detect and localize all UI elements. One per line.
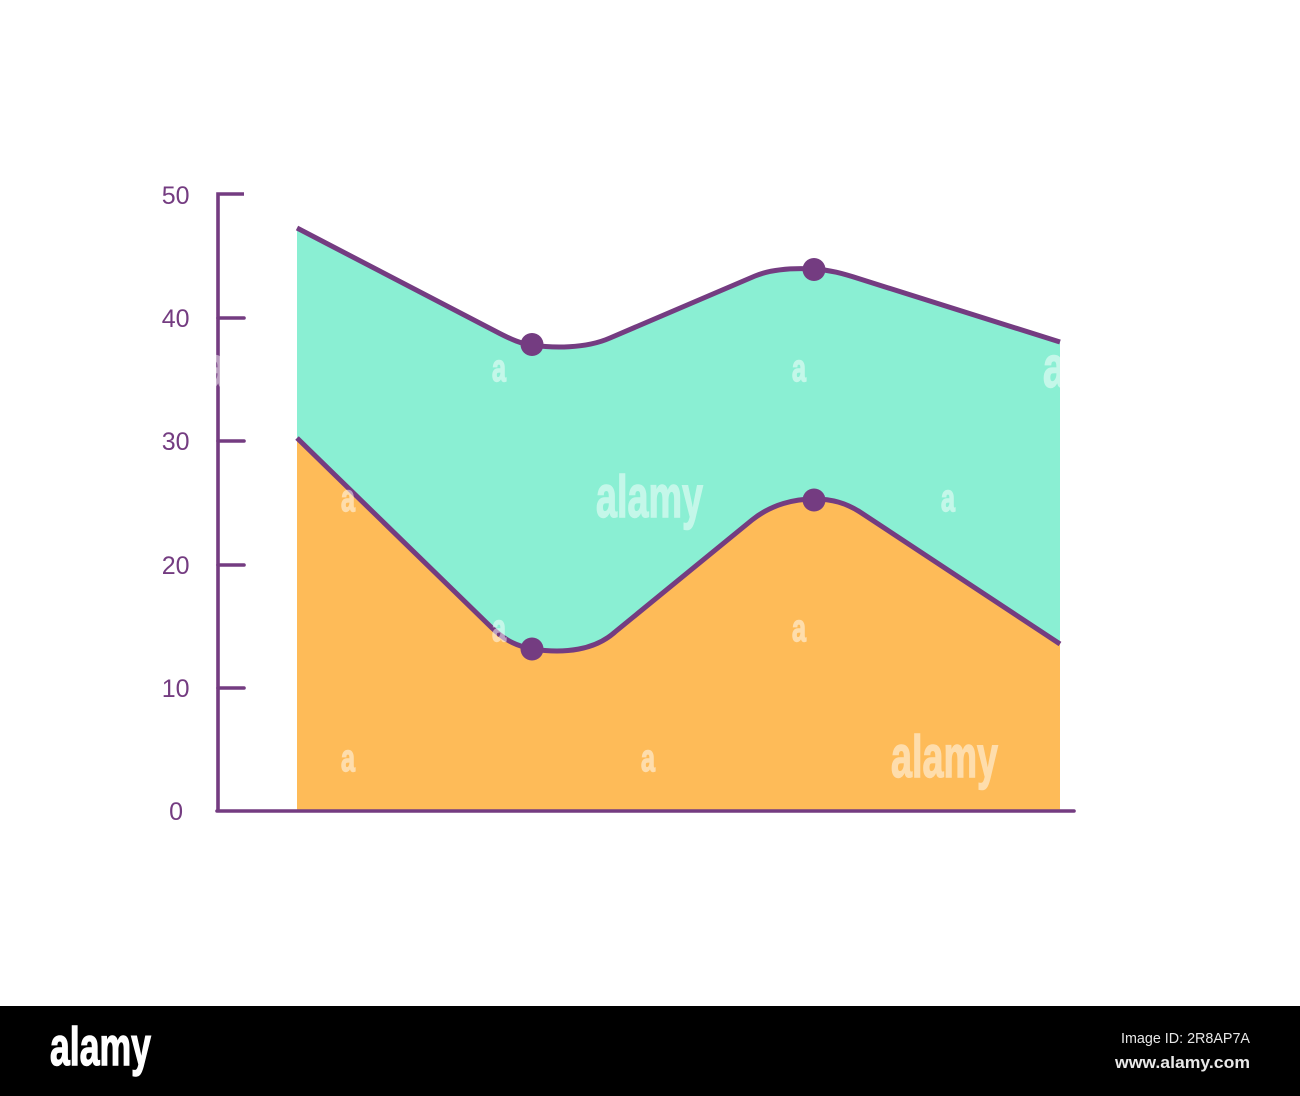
watermarks: a [1043, 335, 1066, 400]
site url: www.alamy.com [1114, 1053, 1250, 1072]
lower line [297, 438, 1060, 651]
y axis labels [162, 182, 190, 826]
watermarks: a [492, 348, 507, 390]
watermarks: a [341, 738, 356, 780]
y axis labels: 30 [162, 428, 190, 456]
x axis [217, 809, 1074, 813]
watermarks: a [204, 335, 227, 400]
watermarks [204, 335, 1066, 790]
watermarks: alamy [596, 464, 703, 530]
watermarks: a [792, 608, 807, 650]
footer logo: alamy [50, 1017, 151, 1077]
y axis labels: 40 [162, 305, 190, 333]
watermarks: a [941, 478, 956, 520]
footer bar [0, 1006, 1300, 1096]
watermarks: a [492, 608, 507, 650]
y axis labels: 0 [169, 798, 183, 826]
watermarks: a [792, 348, 807, 390]
image id: Image ID: 2R8AP7A [1121, 1030, 1250, 1047]
y axis labels: 50 [162, 182, 190, 210]
orange area [297, 438, 1060, 811]
watermarks: a [641, 738, 656, 780]
data points [520, 258, 826, 660]
y axis labels: 10 [162, 675, 190, 703]
upper line [297, 228, 1060, 347]
watermarks: a [341, 478, 356, 520]
watermarks: alamy [891, 724, 998, 790]
y axis [218, 194, 244, 811]
y axis labels: 20 [162, 552, 190, 580]
teal area [297, 228, 1060, 651]
